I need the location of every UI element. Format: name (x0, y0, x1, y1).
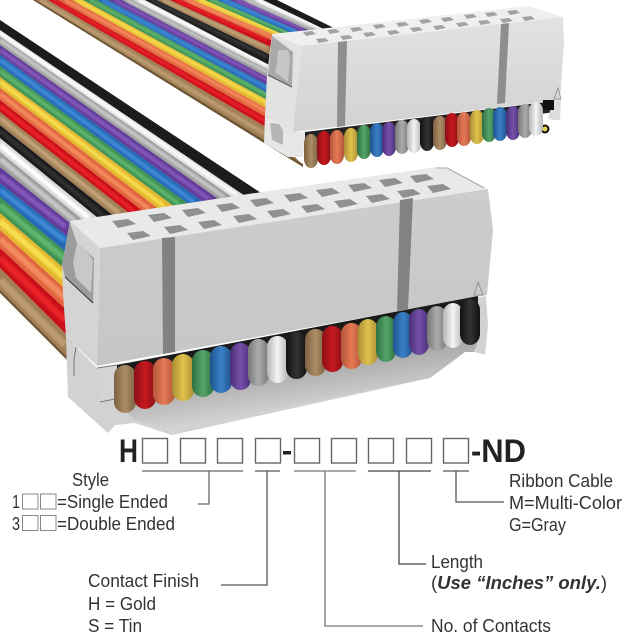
label: style (12, 470, 175, 534)
single ended option: =Single Ended (57, 492, 168, 512)
label: contact finish (88, 571, 199, 636)
ribbon cable: front connector wires (0, 20, 267, 365)
rear gap behind wires (305, 101, 555, 145)
rear housing front face (293, 17, 564, 132)
label: ribbon cable: G=Gray (509, 515, 566, 535)
label: contact finish: Contact Finish (88, 571, 199, 591)
double ended option (12, 514, 175, 534)
single ended option: 1 (12, 492, 20, 512)
rear rolled wires (304, 102, 543, 168)
connector: front housing (62, 167, 493, 435)
ribbon cable: rear connector wires (33, 0, 338, 167)
leader: length (368, 471, 431, 564)
front housing left face (62, 221, 100, 366)
label: contact finish: S = Tin (88, 616, 142, 636)
rear housing lower block (264, 115, 305, 157)
front housing front face (97, 189, 493, 366)
front contact holes (112, 174, 451, 240)
part number code: H (119, 433, 138, 469)
front latch (62, 223, 94, 303)
front rolled wires (114, 299, 480, 413)
label: ribbon cable: M=Multi-Color (509, 493, 622, 513)
label: ribbon cable: Ribbon Cable (509, 471, 613, 491)
part number code: -ND (471, 433, 526, 469)
double ended option: =Double Ended (57, 514, 175, 534)
connector: rear housing (264, 6, 564, 168)
code boxes (142, 438, 468, 463)
rear housing left face (265, 34, 301, 132)
front gap behind wires (117, 296, 478, 388)
double ended option: 3 (12, 514, 20, 534)
leader: number of contacts (294, 471, 423, 626)
label: length (431, 552, 607, 593)
label: number of contacts: No. of Contacts (431, 616, 551, 636)
single ended option (12, 492, 168, 512)
front housing top face (70, 167, 488, 248)
front left lower block (74, 347, 117, 402)
label: contact finish: H = Gold (88, 594, 156, 614)
rear contact holes (303, 10, 535, 43)
label: length: Length (431, 552, 483, 572)
shadow under rolled wires (120, 335, 480, 430)
part number code (119, 433, 526, 469)
label: style: Style (72, 470, 109, 490)
rear right end block (542, 88, 561, 132)
leader: ribbon cable (443, 471, 504, 502)
label: length: (Use “Inches” only.) (431, 573, 607, 593)
code dash (283, 451, 291, 454)
label: ribbon cable (509, 471, 622, 535)
front top ridge (437, 168, 484, 188)
leader: style (142, 471, 243, 504)
rear housing top face (272, 6, 563, 46)
front stripes (162, 237, 175, 354)
rear latch (268, 36, 293, 87)
front mark triangle (474, 282, 483, 295)
front housing lower body (66, 296, 488, 435)
rear stripes (337, 41, 347, 127)
leader: contact finish (221, 471, 280, 585)
